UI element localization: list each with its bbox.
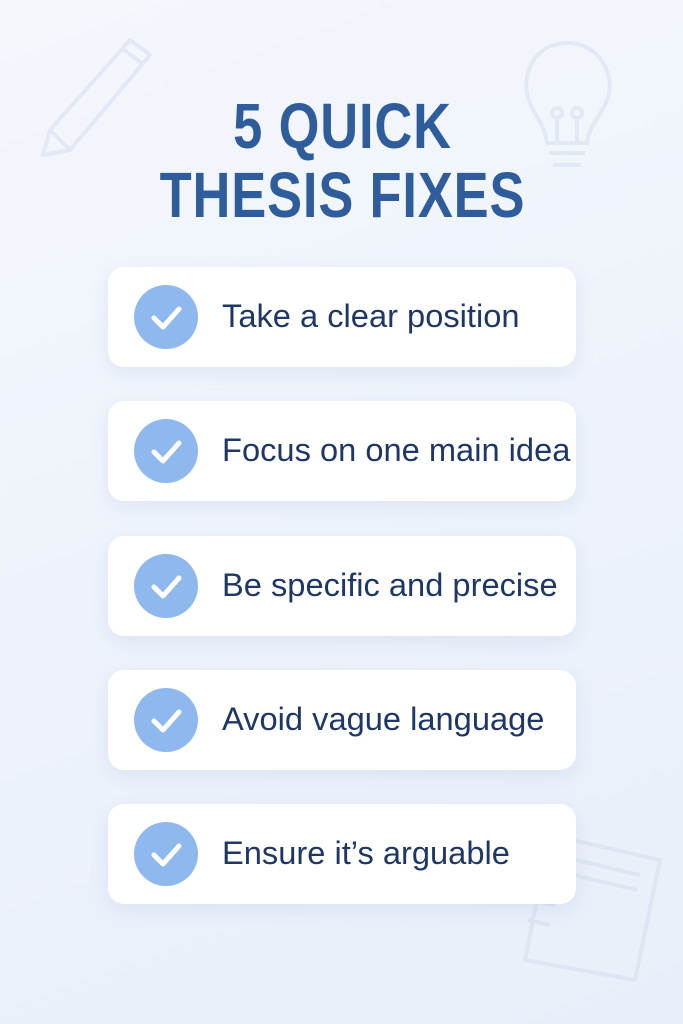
card 2	[108, 401, 576, 501]
icon: check	[134, 285, 198, 349]
icon: pencil	[41, 38, 152, 157]
title: 5 QUICK	[233, 90, 452, 162]
card 1	[108, 267, 576, 367]
icon: notepad	[523, 839, 662, 982]
icon: light bulb	[524, 41, 612, 167]
card 3	[108, 536, 576, 636]
title	[160, 90, 525, 231]
icon: check	[134, 554, 198, 618]
text: Ensure it’s arguable	[222, 835, 510, 871]
text: Be specific and precise	[222, 567, 558, 603]
text: Focus on one main idea	[222, 432, 570, 468]
icon: check	[134, 822, 198, 886]
icon: check	[134, 419, 198, 483]
text: Take a clear position	[222, 298, 520, 334]
card 4	[108, 670, 576, 770]
text: Avoid vague language	[222, 701, 544, 737]
title: THESIS FIXES	[160, 159, 525, 231]
card 5	[108, 804, 576, 904]
icon: check	[134, 688, 198, 752]
